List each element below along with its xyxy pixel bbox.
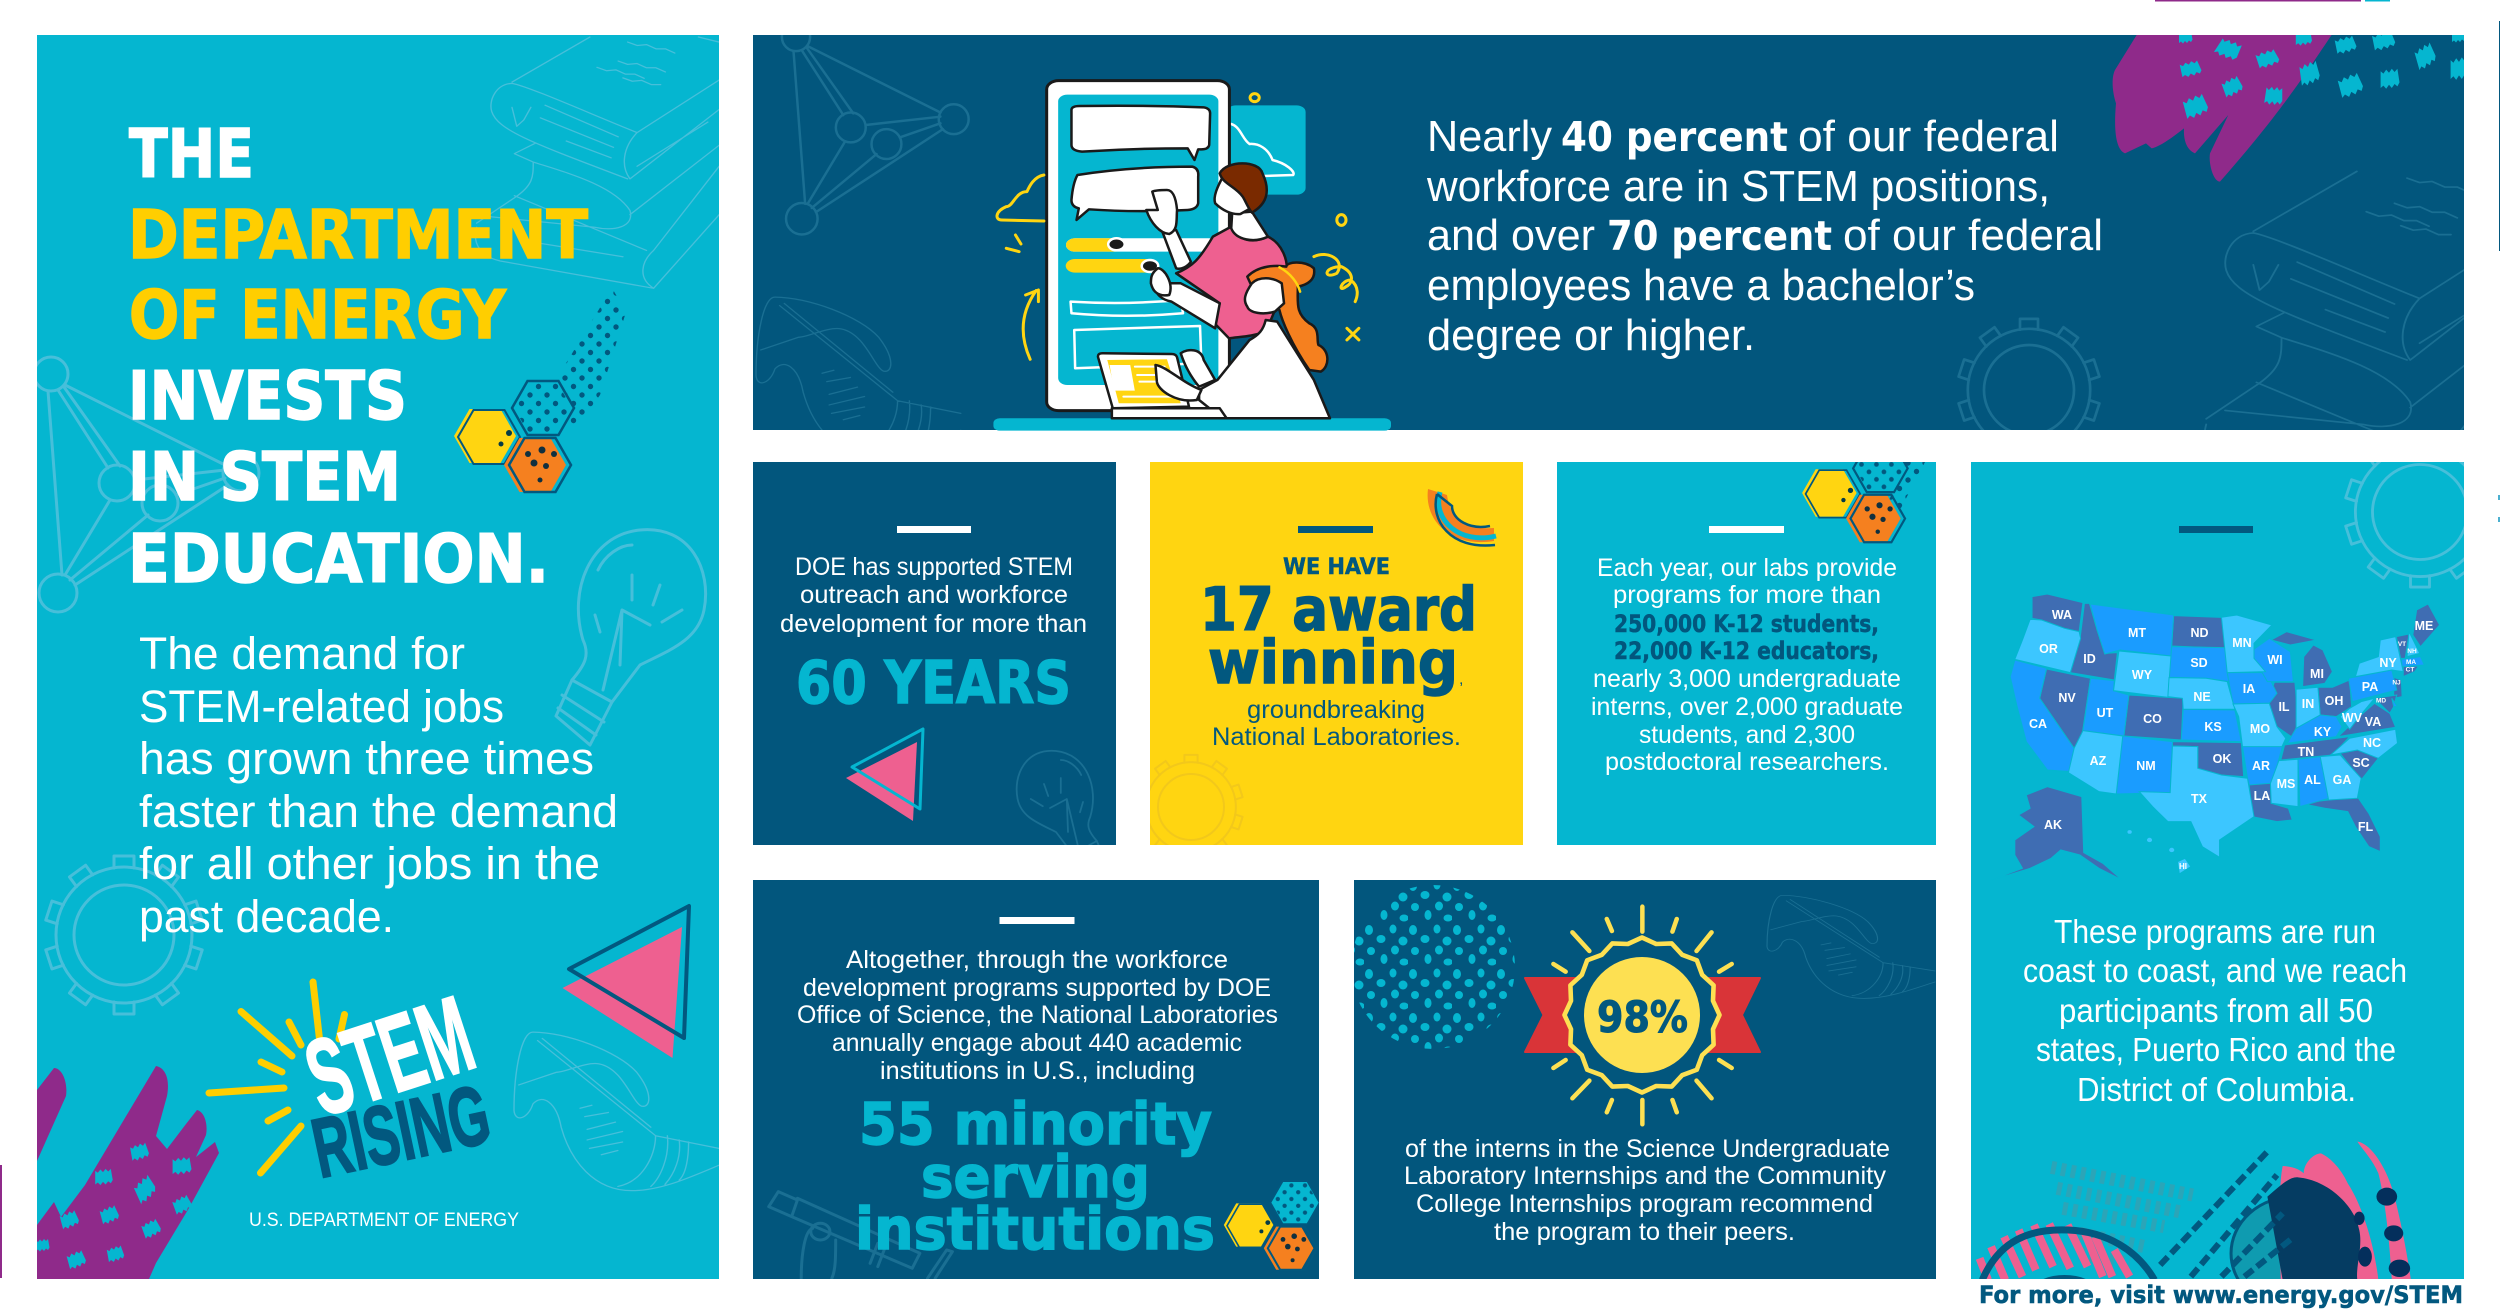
- text: [1591, 554, 1903, 776]
- text: participants from all 50: [2059, 992, 2373, 1029]
- text: annually engage about 440 academic: [832, 1029, 1242, 1057]
- map of United States: FL: [2358, 820, 2373, 834]
- text: These programs are run: [2054, 913, 2376, 950]
- title: INVESTS: [128, 357, 407, 435]
- panel: minority serving institutions: [753, 880, 1320, 1279]
- intro paragraph: faster than the demand: [139, 786, 618, 837]
- text: of the interns in the Science Undergraduate: [1405, 1135, 1890, 1163]
- map of United States: MO: [2250, 722, 2270, 736]
- map of United States: MA: [2406, 659, 2416, 666]
- text: development for more than: [780, 610, 1087, 638]
- text: DOE has supported STEM: [795, 553, 1073, 581]
- map of United States: OH: [2325, 694, 2343, 708]
- map of United States: MI: [2310, 667, 2324, 681]
- map of United States: VT: [2398, 641, 2406, 648]
- map of United States: NC: [2363, 736, 2381, 750]
- panel: 17 labs: [1139, 462, 1523, 859]
- title: DEPARTMENT: [128, 196, 588, 274]
- icon: background goggles: [1767, 895, 1935, 998]
- title: IN STEM: [128, 438, 401, 516]
- divider bar: [897, 526, 971, 533]
- decorative purple brush: [36, 1066, 219, 1279]
- map of United States: MS: [2277, 777, 2295, 791]
- text: students, and 2,300: [1639, 721, 1855, 749]
- stat: 55 minority serving institutions: serving: [921, 1143, 1150, 1211]
- intro paragraph: past decade.: [139, 891, 394, 942]
- map of United States: NH: [2407, 648, 2417, 655]
- icon: triangle: [846, 729, 923, 821]
- map of United States: WI: [2267, 653, 2283, 667]
- icon: hexagons with dot trail: [454, 288, 626, 492]
- logo caption: U.S. DEPARTMENT OF ENERGY: [249, 1209, 519, 1231]
- text: nearly 3,000 undergraduate: [1593, 665, 1901, 693]
- intro paragraph: [139, 628, 618, 942]
- comma: ,: [1459, 671, 1463, 688]
- intro paragraph: The demand for: [139, 628, 465, 679]
- text: National Laboratories.: [1212, 723, 1461, 751]
- text: 22,000 K-12 educators,: [1614, 637, 1879, 665]
- decorative purple brush: [2113, 30, 2470, 182]
- icon: hexagons: [1224, 1181, 1320, 1270]
- map of United States: OR: [2039, 642, 2058, 656]
- stat: 55 minority serving institutions: [855, 1090, 1215, 1263]
- we have: WE HAVE: [1283, 555, 1390, 580]
- map of United States: KY: [2314, 725, 2332, 739]
- text: the program to their peers.: [1494, 1218, 1795, 1246]
- workforce statement: workforce are in STEM positions,: [1426, 162, 2050, 211]
- workforce statement: Nearly: [1427, 112, 1552, 161]
- decorative dot circle: [1351, 885, 1515, 1049]
- icon: arc shape: [1428, 489, 1496, 546]
- workforce statement: and over: [1427, 211, 1595, 260]
- map of United States: VA: [2365, 715, 2381, 729]
- icon: background gear: [2344, 462, 2464, 588]
- background line art: [756, 23, 2500, 506]
- map of United States: CT: [2406, 666, 2414, 674]
- map of United States: AL: [2304, 773, 2321, 787]
- map of United States: IN: [2302, 697, 2314, 711]
- map of United States: AZ: [2090, 754, 2107, 768]
- map of United States: NM: [2136, 759, 2156, 773]
- map of United States: NJ: [2392, 680, 2401, 686]
- decorative brush art: [1976, 1142, 2411, 1279]
- map of United States: MD: [2376, 698, 2386, 704]
- map of United States: WA: [2052, 608, 2072, 622]
- stat: 60 years: 60 YEARS: [796, 648, 1071, 717]
- background line art: books, molecule, bulb, gear, goggles: [34, 37, 719, 1191]
- text: states, Puerto Rico and the: [2036, 1031, 2396, 1068]
- map of United States: AR: [2252, 759, 2270, 773]
- divider bar: [2179, 526, 2253, 533]
- text: development programs supported by DOE: [803, 974, 1271, 1002]
- workforce statement: of our federal: [1843, 211, 2103, 260]
- map of United States: NY: [2379, 656, 2397, 670]
- text: 250,000 K-12 students,: [1614, 610, 1879, 638]
- map of United States: AK: [2044, 818, 2062, 832]
- map of United States: WV: [2342, 711, 2363, 725]
- map of United States: [1992, 594, 2440, 880]
- stat: 55 minority serving institutions: institutions: [855, 1195, 1215, 1263]
- map of United States: TN: [2298, 745, 2314, 759]
- text: programs for more than: [1613, 581, 1881, 609]
- divider bar: [1298, 526, 1373, 533]
- map of United States: IA: [2243, 682, 2255, 696]
- panel: coast to coast: [1971, 462, 2464, 1279]
- map of United States: WY: [2132, 668, 2153, 682]
- text: coast to coast, and we reach: [2023, 952, 2407, 989]
- map of United States: SD: [2190, 656, 2208, 670]
- logo: STEM Rising: [209, 972, 498, 1196]
- panel: 98 percent: [1351, 880, 1936, 1279]
- map of United States: ND: [2190, 626, 2209, 640]
- map of United States: UT: [2097, 706, 2114, 720]
- icon: background gear: [1150, 754, 1244, 845]
- text: outreach and workforce: [800, 581, 1068, 609]
- footer link: For more, visit www.energy.gov/STEM: [1979, 1281, 2463, 1309]
- title: EDUCATION.: [128, 520, 549, 598]
- text: [780, 553, 1087, 638]
- woman: [1098, 262, 1330, 418]
- logo: STEM Rising: RISING: [304, 1067, 498, 1196]
- map of United States: HI: [2179, 862, 2187, 871]
- intro paragraph: for all other jobs in the: [139, 838, 600, 889]
- map of United States: GA: [2333, 773, 2351, 787]
- map of United States: NE: [2193, 690, 2211, 704]
- map of United States: IL: [2278, 700, 2290, 714]
- text: [2023, 913, 2407, 1108]
- workforce statement: 40 percent: [1561, 113, 1788, 161]
- text: [797, 946, 1278, 1085]
- text: groundbreaking: [1247, 696, 1425, 724]
- icon: hexagons: [1802, 462, 1925, 544]
- text: District of Columbia.: [2077, 1071, 2356, 1108]
- map of United States: TX: [2191, 792, 2208, 806]
- man: [1146, 163, 1287, 338]
- text: institutions in U.S., including: [880, 1057, 1195, 1085]
- panel: federal workforce: [753, 35, 2464, 431]
- map of United States: OK: [2213, 752, 2231, 766]
- map of United States: MT: [2128, 626, 2146, 640]
- workforce statement: employees have a bachelor’s: [1427, 261, 1975, 310]
- divider bar: [1709, 526, 1784, 533]
- text: Office of Science, the National Laboratories: [797, 1001, 1278, 1029]
- icon: background microscope: [769, 1192, 952, 1278]
- text: College Internships program recommend: [1416, 1190, 1873, 1218]
- text: interns, over 2,000 graduate: [1591, 693, 1903, 721]
- text: Laboratory Internships and the Community: [1404, 1162, 1886, 1190]
- panel: intro: [34, 35, 719, 1279]
- text: Each year, our labs provide: [1597, 554, 1897, 582]
- stat: 17 award winning: [1200, 575, 1477, 698]
- workforce statement: 70 percent: [1607, 212, 1832, 260]
- stat: 17 award winning: 17 award: [1200, 575, 1477, 645]
- intro paragraph: has grown three times: [139, 733, 594, 784]
- title: OF ENERGY: [129, 276, 507, 354]
- icon: triangle: [562, 906, 689, 1058]
- workforce statement: degree or higher.: [1427, 311, 1755, 360]
- badge: 98%: [1525, 907, 1760, 1124]
- stat: 55 minority serving institutions: 55 minority: [859, 1090, 1212, 1158]
- title: THE: [129, 115, 254, 193]
- text: [1404, 1135, 1890, 1246]
- badge: 98%: 98%: [1597, 993, 1688, 1043]
- map of United States: LA: [2254, 789, 2270, 803]
- workforce statement: of our federal: [1798, 112, 2059, 161]
- icon: background bulb: [1016, 750, 1100, 845]
- map of United States: NV: [2058, 691, 2076, 705]
- map of United States: CO: [2143, 712, 2162, 726]
- divider bar: [1000, 917, 1074, 924]
- text: postdoctoral researchers.: [1605, 748, 1889, 776]
- text: Altogether, through the workforce: [846, 946, 1228, 974]
- logo: STEM Rising: STEM: [292, 972, 487, 1139]
- intro paragraph: STEM-related jobs: [139, 681, 504, 732]
- panel: labs programs: [1557, 445, 1936, 845]
- map of United States: SC: [2352, 756, 2370, 770]
- title: [128, 115, 588, 598]
- map of United States: KS: [2204, 720, 2222, 734]
- map of United States: CA: [2029, 717, 2047, 731]
- map of United States: ME: [2415, 619, 2433, 633]
- workforce statement: [1426, 112, 2103, 360]
- map of United States: MN: [2232, 636, 2252, 650]
- map of United States: PA: [2362, 680, 2378, 694]
- stat: 17 award winning: winning: [1208, 628, 1458, 698]
- map of United States: ID: [2083, 652, 2096, 666]
- text: [1212, 696, 1461, 751]
- panel: 60 years: [753, 462, 1116, 880]
- illustration: two people with a giant phone: [993, 81, 1391, 431]
